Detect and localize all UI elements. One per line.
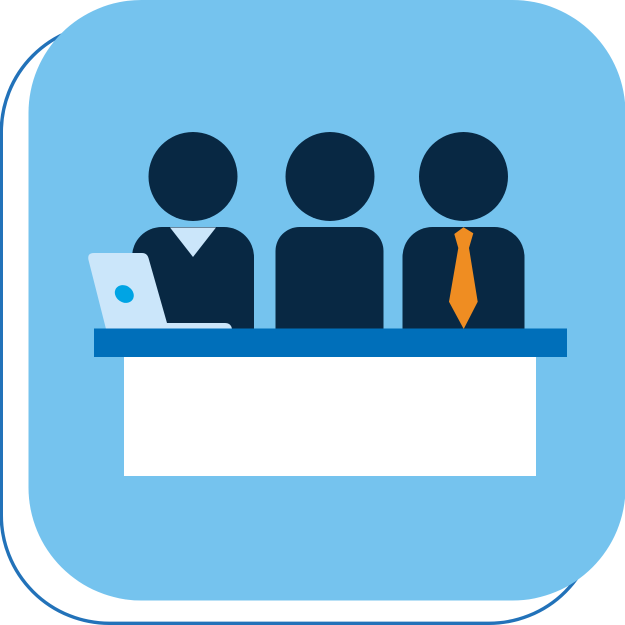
icon: laptop logo dot	[111, 281, 137, 307]
table front	[124, 357, 536, 476]
icon: left person	[132, 132, 254, 329]
icon: right person with tie	[402, 132, 524, 329]
table top	[94, 328, 567, 357]
icon: middle person	[276, 132, 384, 329]
icon: laptop	[88, 253, 232, 329]
icon: orange tie	[449, 227, 478, 329]
icon: v-neck collar	[170, 228, 216, 257]
